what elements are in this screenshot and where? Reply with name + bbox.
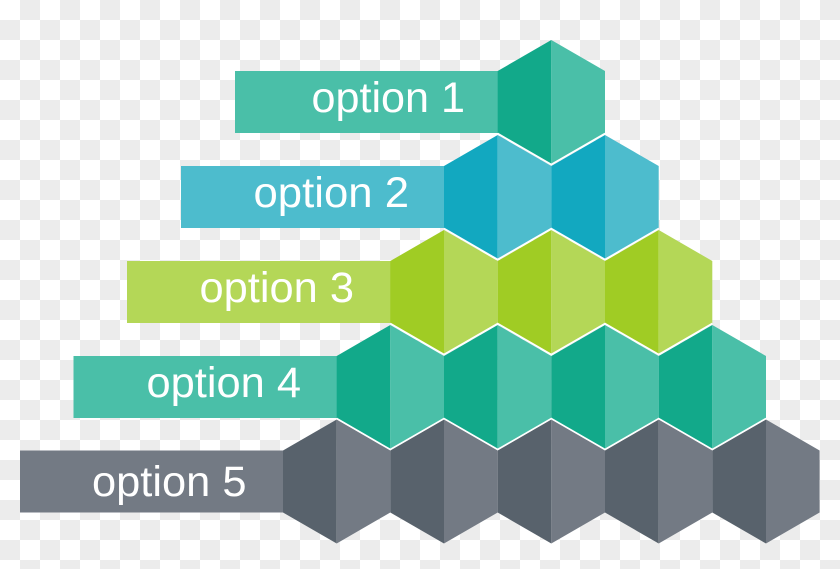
label: option 1: option 1 (312, 74, 465, 122)
hexagons: option 5 (283, 420, 820, 544)
label: option 5: option 5 (92, 458, 246, 506)
label: option 4: option 4 (146, 359, 301, 407)
bar: option 5 (20, 450, 284, 512)
hexagon: option 1 (498, 40, 605, 164)
bar: option 2 (181, 166, 444, 228)
hexagons: option 2 (444, 135, 659, 260)
bar: option 3 (127, 261, 390, 323)
row: option 1 (235, 40, 605, 164)
row: option 4 (74, 325, 766, 450)
hexagons: option 4 (337, 325, 766, 450)
label: option 2: option 2 (254, 169, 409, 217)
label: option 3: option 3 (200, 264, 354, 312)
bar: option 4 (74, 356, 337, 418)
bar: option 1 (235, 71, 498, 133)
row: option 3 (127, 230, 712, 354)
hexagons: option 3 (390, 230, 712, 354)
row: option 5 (20, 420, 820, 544)
row: option 2 (181, 135, 659, 260)
